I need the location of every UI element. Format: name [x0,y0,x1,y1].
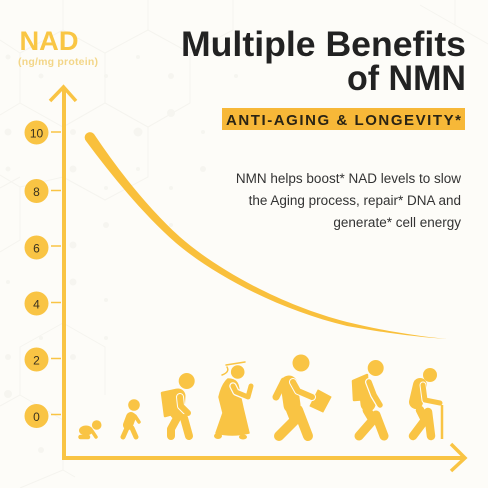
y axis with arrow [50,87,76,458]
icon: child [123,399,140,437]
icon: elderly person with cane [413,368,442,439]
y axis scale [24,120,61,428]
y-axis title: NAD [18,26,98,68]
y axis scale: 2 [33,354,40,368]
banner: anti-aging and longevity: ANTI-AGING & LONGEVITY* [226,112,461,129]
y axis scale: 10 [30,126,43,140]
heading: Multiple Benefits [181,25,466,64]
y-axis title: NAD: NAD [20,26,78,56]
icon: graduate in gown [214,362,251,440]
y axis scale: 4 [33,298,40,312]
y-axis title: NAD: (ng/mg protein) [18,56,98,68]
icon: baby [79,420,101,437]
icon: stooped man with backpack [353,360,384,436]
y axis scale: 8 [33,185,40,199]
heading [181,25,466,98]
description text: NMN helps boost* NAD levels to slow [236,171,461,186]
y axis scale: 0 [33,410,40,424]
icon: man with briefcase [276,354,331,436]
y axis scale: 6 [33,242,40,256]
heading: of NMN [347,59,466,98]
declining NAD curve [85,132,447,339]
description text [236,171,461,230]
icon: student with backpack [162,373,195,436]
description text: generate* cell energy [333,215,461,230]
x axis with arrow [62,444,465,471]
description text: the Aging process, repair* DNA and [249,193,461,208]
